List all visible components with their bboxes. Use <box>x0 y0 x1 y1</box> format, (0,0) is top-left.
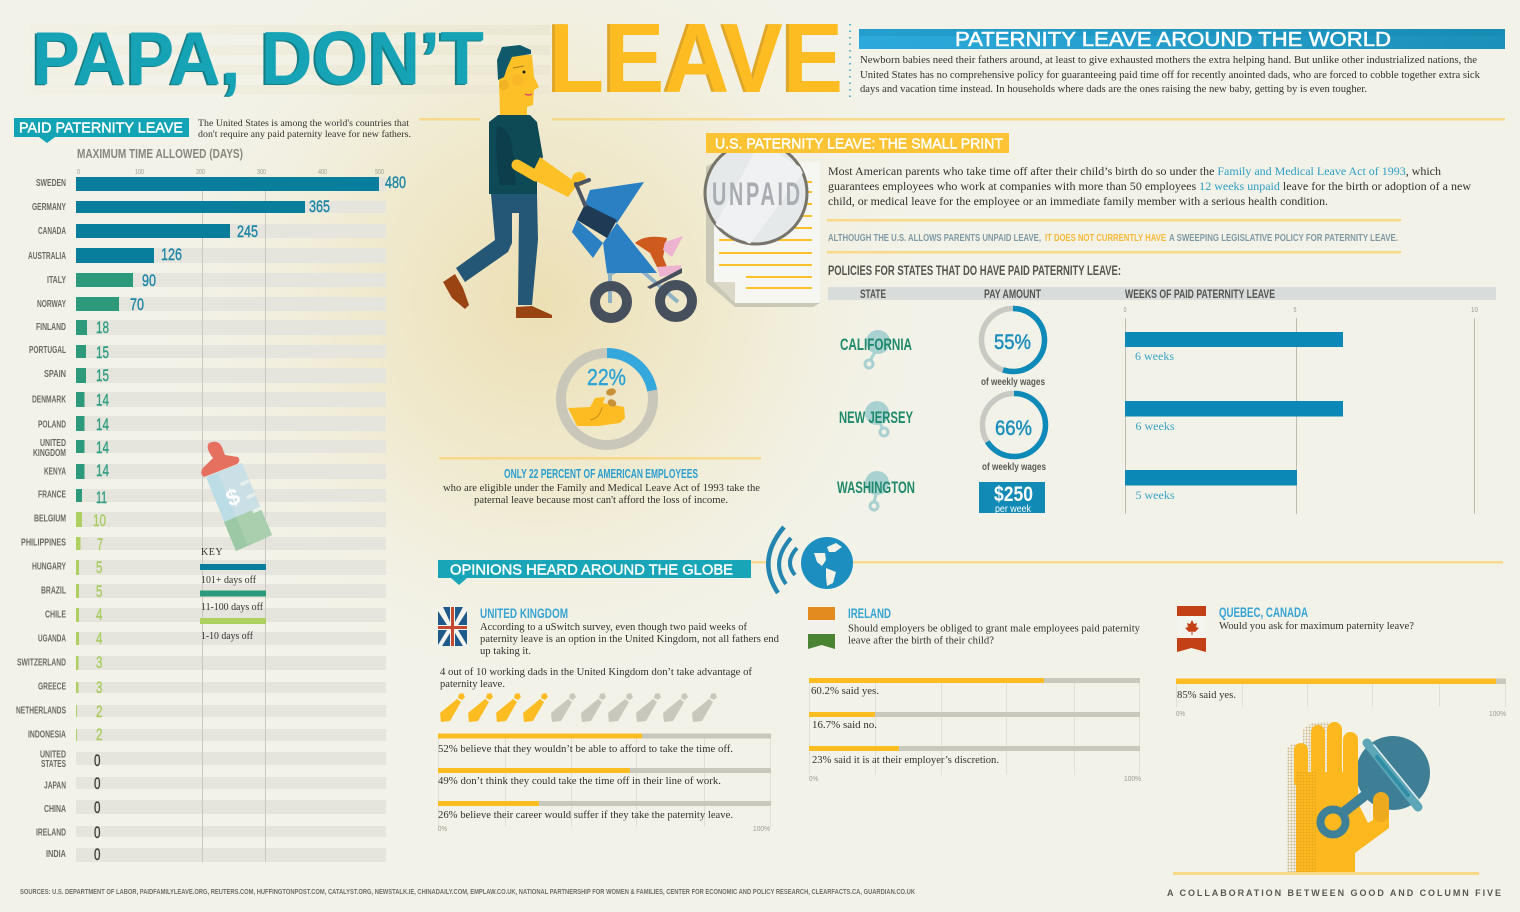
donut: California 55 percent: of weekly wages <box>981 377 1045 388</box>
bar chart: Ireland answers <box>809 678 1141 783</box>
row: Finland: FINLAND <box>36 322 66 333</box>
row: Chile: CHILE <box>45 610 66 620</box>
row: Japan: JAPAN <box>44 780 66 792</box>
icon: baby bottle: $ <box>222 483 244 512</box>
bar chart: weeks of leave: 0 <box>1124 305 1126 314</box>
donut: New Jersey 66 percent: 66% <box>995 417 1032 440</box>
bar: Washington: 5 weeks <box>1136 490 1175 502</box>
row: France: FRANCE <box>38 490 66 500</box>
row: Finland <box>36 318 109 337</box>
text: FMLA description <box>828 166 1472 208</box>
heading: small print: U.S. PATERNITY LEAVE: THE SMALL PRINT <box>715 136 1003 152</box>
text: uSwitch survey: up taking it. <box>480 646 531 657</box>
axis numbers: 300 <box>257 167 266 176</box>
hair <box>497 45 531 80</box>
heading: Ireland: IRELAND <box>848 605 891 621</box>
heading: paid paternity leave <box>14 118 189 143</box>
row: Netherlands <box>16 702 102 721</box>
bar chart: weeks of leave: 10 <box>1471 305 1478 314</box>
title <box>30 3 843 113</box>
description: don't require any paid paternity leave for new fathers. <box>198 129 411 140</box>
row: United States: UNITED <box>40 750 66 760</box>
description <box>198 119 411 140</box>
legend key: 101+ days off <box>201 575 257 586</box>
text: income explanation <box>443 483 760 506</box>
row: France <box>38 488 107 507</box>
text: 4 out of 10 <box>440 667 753 690</box>
sources: SOURCES: U.S. DEPARTMENT OF LABOR, PAIDFAMILYLEAVE.ORG, REUTERS.COM, HUFFINGTONPOST.COM, CATALYST.ORG, NEWSTALK.IE, CHINADAILY.COM, EMPLAW.CO.UK, NATIONAL PARTNERSHIP FOR WOMEN & FAMILIES, CENTER FOR ECONOMIC AND POLICY RESEARCH, CLEARFACTS.CA, GUARDIAN.CO.UK <box>20 887 915 896</box>
baby legs <box>635 237 667 267</box>
table header: WEEKS OF PAID PATERNITY LEAVE <box>1125 289 1275 301</box>
title: PAPA, DON’T <box>32 16 484 100</box>
state name: Washington: WASHINGTON <box>837 479 915 497</box>
heading: around the world <box>859 29 1505 51</box>
pay box: Washington $250 <box>979 482 1045 515</box>
rattle handle and ring <box>1320 790 1372 834</box>
section: Ireland <box>808 605 1141 783</box>
bar: 60.2 percent: 60.2% said yes. <box>811 686 879 697</box>
row: Philippines: PHILIPPINES <box>21 538 66 548</box>
row: United Kingdom: UNITED <box>40 438 66 449</box>
heading: only 22 percent: ONLY 22 PERCENT OF AMERICAN EMPLOYEES <box>504 467 698 481</box>
text: income explanation: who are eligible under the Family and Medical Leave Act of 1993 take the <box>443 483 760 494</box>
text: Ireland question: leave after the birth of their child? <box>848 636 994 646</box>
legend key: 1-10 days off <box>201 631 254 642</box>
row: Germany: GERMANY <box>32 202 66 213</box>
row: Kenya: 14 <box>96 461 109 480</box>
row: Hungary: HUNGARY <box>32 562 66 572</box>
row: Australia: AUSTRALIA <box>28 251 66 262</box>
row: United Kingdom: KINGDOM <box>33 448 66 459</box>
row: Italy: 90 <box>142 271 156 290</box>
row: Ireland: IRELAND <box>36 828 66 838</box>
heading: around the world: PATERNITY LEAVE AROUND THE WORLD <box>955 29 1391 51</box>
neck and face <box>499 55 539 115</box>
row: Poland: POLAND <box>38 420 66 430</box>
stroller basket <box>577 204 617 238</box>
text: income explanation: paternal leave because most can't afford the loss of income. <box>474 495 728 506</box>
intro text: Newborn babies need their fathers around, at least to give exhausted mothers the extra helping hand. But unlike other industrialized nations, the <box>860 55 1477 66</box>
illustration: father with stroller <box>443 45 692 318</box>
table header: PAY AMOUNT <box>984 289 1041 301</box>
bar: New Jersey <box>1125 401 1343 433</box>
row: Switzerland: 3 <box>96 653 102 672</box>
torso <box>489 115 543 194</box>
icon: Canadian flag <box>1177 606 1206 652</box>
row: United Kingdom: 14 <box>96 438 109 457</box>
bar: 60.2 percent <box>809 678 1140 697</box>
donut: 22 percent: 22% <box>587 364 626 390</box>
row: Belgium <box>34 511 106 530</box>
row: Spain: SPAIN <box>44 369 66 380</box>
description: The United States is among the world's countries that <box>198 119 409 129</box>
row: Ireland <box>36 823 100 842</box>
row: Portugal: PORTUGAL <box>29 345 66 356</box>
bar: 49 percent: 49% don’t think they could take the time off in their line of work. <box>438 776 721 787</box>
row: Uganda: UGANDA <box>38 634 66 644</box>
row: India: 0 <box>94 845 100 864</box>
row: Italy: ITALY <box>47 275 66 286</box>
thumb <box>1373 792 1389 822</box>
text: FMLA description: child, or medical leave for the employee or an immediate family member with a serious health condition. <box>828 196 1328 208</box>
row: Kenya: KENYA <box>44 466 66 478</box>
donut: New Jersey 66 percent: of weekly wages <box>982 462 1046 473</box>
jeans <box>456 194 538 305</box>
heading: Quebec: QUEBEC, CANADA <box>1219 604 1308 620</box>
heading: opinions <box>438 560 751 585</box>
icon: signal waves <box>768 527 797 593</box>
bar: 23 percent <box>809 746 1140 766</box>
heading: paid paternity leave: PAID PATERNITY LEAVE <box>19 120 183 136</box>
axis numbers: 400 <box>318 167 327 176</box>
heading: state policies: POLICIES FOR STATES THAT DO HAVE PAID PATERNITY LEAVE: <box>828 263 1121 278</box>
arm <box>517 157 586 197</box>
bar: California <box>1125 332 1343 363</box>
callout: no sweeping policy <box>827 219 1401 254</box>
bar chart: Quebec answer <box>1176 678 1506 718</box>
row: India <box>46 845 100 864</box>
stroller handle <box>576 180 589 205</box>
panel: 22 percent stat <box>439 353 761 506</box>
bar: New Jersey: 6 weeks <box>1136 421 1175 433</box>
row: China <box>44 798 100 817</box>
row: Uganda <box>38 629 102 648</box>
row: Spain: 15 <box>96 366 109 385</box>
stroller frame <box>608 263 678 303</box>
rattle band <box>1367 743 1418 807</box>
row: Kenya <box>44 461 109 480</box>
intro text: United States has no comprehensive policy for guaranteeing paid time off for recently anointed dads, who are forced to cobble together extra sick <box>860 70 1481 81</box>
row: Hungary: 5 <box>96 558 102 577</box>
row: Belgium: BELGIUM <box>34 514 66 524</box>
bar: 52 percent <box>438 734 771 755</box>
text: Ireland question: Should employers be obliged to grant male employees paid paternity <box>848 624 1141 634</box>
row: India: INDIA <box>46 849 66 860</box>
panel: paternity leave around the world <box>859 29 1505 95</box>
axis numbers: 500 <box>375 167 384 176</box>
panel: opinions around the globe <box>20 527 1506 898</box>
bar: 26 percent <box>438 801 771 821</box>
bar chart: UK reasons: 100% <box>753 824 770 833</box>
row: Indonesia: 2 <box>96 725 102 744</box>
row: Canada: CANADA <box>38 226 66 237</box>
row: Greece: 3 <box>96 678 102 697</box>
text: uSwitch survey: paternity leave is an option in the United Kingdom, not all fathers end <box>480 634 780 645</box>
title stripes <box>30 25 550 94</box>
baseline rule <box>1173 872 1479 875</box>
row: Poland <box>38 415 109 434</box>
legend key: 11-100 days off <box>201 602 264 613</box>
text: Quebec question: Would you ask for maximum paternity leave? <box>1219 621 1414 632</box>
row: Portugal <box>29 343 109 362</box>
icon: rattle New Jersey <box>865 401 889 436</box>
bar chart: UK reasons: 0% <box>438 824 447 833</box>
bar: 16.7 percent: 16.7% said no. <box>812 720 877 731</box>
donut: California 55 percent: 55% <box>994 331 1031 354</box>
title: LEAVE <box>546 3 840 113</box>
heading: opinions: OPINIONS HEARD AROUND THE GLOBE <box>450 562 733 578</box>
bar: California: 6 weeks <box>1135 351 1175 363</box>
row: Brazil: 5 <box>96 582 102 601</box>
row: Finland: 18 <box>96 318 109 337</box>
row: Australia <box>28 245 182 264</box>
row: France: 11 <box>96 488 107 507</box>
text: FMLA description: guarantees employees who work at companies with more than 50 employees 12 weeks unpaid leave for the birth or adoption of a new <box>828 181 1472 193</box>
panel: paid paternity leave <box>14 118 411 864</box>
title: PAPA, DON’T <box>30 17 482 101</box>
title: LEAVE <box>549 3 843 113</box>
table header: STATE <box>860 289 886 301</box>
row: Hungary <box>32 558 102 577</box>
stroller seat <box>572 220 657 273</box>
donut: 22 percent <box>561 353 653 445</box>
row: Brazil: BRAZIL <box>41 586 66 596</box>
illustration: document with magnifier <box>705 142 820 307</box>
row: Japan: 0 <box>94 774 100 793</box>
row: China: 0 <box>94 798 100 817</box>
icon: globe <box>801 537 853 589</box>
illustration: hand holding rattle <box>1287 722 1430 873</box>
row: Philippines <box>21 535 103 554</box>
stroller wheels <box>595 285 692 318</box>
sleeve <box>496 125 516 185</box>
row: Indonesia <box>28 725 102 744</box>
row: Norway <box>37 295 144 314</box>
bar chart: days by country <box>16 173 406 864</box>
bar chart: Quebec answer: 85% said yes. <box>1177 690 1236 701</box>
intro text <box>860 55 1481 95</box>
callout: no sweeping policy: A SWEEPING LEGISLATIVE POLICY FOR PATERNITY LEAVE. <box>1169 232 1398 244</box>
bar: 16.7 percent <box>809 712 1140 731</box>
row: Germany: 365 <box>309 197 330 216</box>
bar: 52 percent: 52% believe that they wouldn’t be able to afford to take the time off. <box>438 744 733 755</box>
row: United States: STATES <box>41 759 66 770</box>
donut: New Jersey 66 percent <box>982 394 1046 473</box>
row: Switzerland <box>17 653 102 672</box>
row: China: CHINA <box>44 804 66 815</box>
icon: hand with coins <box>568 387 625 426</box>
pay box: Washington $250: per week <box>995 504 1032 515</box>
bar chart: Ireland answers: 0% <box>809 774 818 783</box>
heading: UK: UNITED KINGDOM <box>480 605 568 621</box>
palm shading <box>1296 772 1316 873</box>
callout: no sweeping policy: ALTHOUGH THE U.S. ALLOWS PARENTS UNPAID LEAVE, <box>828 232 1041 244</box>
row: Norway: NORWAY <box>37 299 66 310</box>
bar chart: weeks of leave: 5 <box>1294 305 1296 314</box>
yellow divider lines <box>419 118 1505 120</box>
text: Ireland question <box>848 624 1141 646</box>
text: uSwitch survey: According to a uSwitch survey, even though two paid weeks of <box>480 622 747 633</box>
row: Poland: 14 <box>96 415 109 434</box>
bar chart: weeks of leave <box>1124 305 1478 514</box>
text: FMLA description: Most American parents who take time off after their child’s birth do so under the Family and Medical Leave Act of 1993 , which <box>828 166 1441 178</box>
row: Sweden <box>36 173 406 192</box>
illustration: document with magnifier: UNPAID <box>712 176 800 212</box>
row: Indonesia: INDONESIA <box>28 730 66 740</box>
back shoe <box>443 274 469 309</box>
row: United States <box>40 750 100 770</box>
bar chart: Quebec answer: 0% <box>1176 709 1185 718</box>
row: Australia: 126 <box>161 245 182 264</box>
row: Norway: 70 <box>130 295 144 314</box>
row: United Kingdom <box>33 438 109 459</box>
row: Chile <box>45 605 102 624</box>
bar: 26 percent: 26% believe their career would suffer if they take the paternity leave. <box>438 810 733 821</box>
axis numbers: 100 <box>135 167 144 176</box>
row: Portugal: 15 <box>96 343 109 362</box>
legend key <box>200 547 266 642</box>
icon: baby bottle <box>201 442 272 551</box>
row: Chile: 4 <box>96 605 102 624</box>
row: Denmark: 14 <box>96 390 109 410</box>
row: Greece <box>38 678 102 697</box>
row: Germany <box>32 197 330 216</box>
footrest <box>647 268 682 289</box>
hand shadow <box>1287 722 1330 873</box>
axis numbers: 200 <box>196 167 205 176</box>
donut: California 55 percent <box>981 308 1045 388</box>
row: Spain <box>44 366 109 385</box>
row: Philippines: 7 <box>97 535 103 554</box>
text: 4 out of 10: 4 out of 10 working dads in the United Kingdom don’t take advantage of <box>440 667 753 678</box>
dotted divider <box>849 24 851 98</box>
fingers and palm <box>1294 722 1389 873</box>
section: Quebec <box>1176 604 1506 718</box>
text: uSwitch survey <box>480 622 780 657</box>
row: Canada: 245 <box>237 222 258 241</box>
intro text: days and vacation time instead. In households where dads are the ones raising the new baby, getting by is even tougher. <box>860 84 1367 95</box>
pictogram: ties <box>440 693 717 722</box>
row: Denmark: DENMARK <box>32 394 67 406</box>
bar: Washington <box>1125 470 1297 502</box>
row: Brazil <box>41 582 102 601</box>
credit: A COLLABORATION BETWEEN GOOD AND COLUMN FIVE <box>1167 888 1501 898</box>
row: United States: 0 <box>94 751 100 770</box>
row: Ireland: 0 <box>94 823 100 842</box>
bar: 49 percent <box>438 768 771 787</box>
face details <box>499 66 532 95</box>
section: United Kingdom <box>438 605 780 833</box>
icon: rattle California <box>865 330 890 368</box>
stroller canopy <box>585 182 644 223</box>
row: Sweden: 480 <box>385 173 406 192</box>
row: Uganda: 4 <box>96 629 102 648</box>
row: Japan <box>44 774 100 793</box>
text: 4 out of 10: paternity leave. <box>440 679 505 690</box>
bar chart: UK reasons <box>438 734 771 833</box>
row: Switzerland: SWITZERLAND <box>17 658 66 668</box>
row: Netherlands: NETHERLANDS <box>16 706 66 716</box>
baby shoes <box>657 236 683 277</box>
panel: small print <box>705 133 1496 515</box>
table header <box>828 287 1496 301</box>
bar chart: Ireland answers: 100% <box>1124 774 1141 783</box>
icon: UK flag <box>438 607 467 648</box>
row: Greece: GREECE <box>38 682 66 692</box>
row: Canada <box>38 222 258 241</box>
front shoe <box>516 306 552 318</box>
row: Denmark <box>32 390 109 410</box>
legend key: KEY <box>201 547 223 558</box>
bar: 23 percent: 23% said it is at their employer’s discretion. <box>812 755 999 766</box>
icon: rattle Washington <box>865 471 889 510</box>
row: Netherlands: 2 <box>96 702 102 721</box>
bar chart: Quebec answer: 100% <box>1489 709 1506 718</box>
state name: California: CALIFORNIA <box>840 336 912 354</box>
axis numbers: 0 <box>77 167 80 176</box>
axis numbers <box>77 167 384 176</box>
icon: Irish flag <box>808 607 835 649</box>
pay box: Washington $250: $250 <box>994 483 1033 506</box>
callout: no sweeping policy: IT DOES NOT CURRENTLY HAVE <box>1045 232 1166 244</box>
rattle ball <box>1356 736 1430 810</box>
row: Belgium: 10 <box>93 511 106 530</box>
state name: New Jersey: NEW JERSEY <box>839 409 913 427</box>
chart subtitle: MAXIMUM TIME ALLOWED (DAYS) <box>77 146 243 161</box>
row: Italy <box>47 271 156 290</box>
row: Sweden: SWEDEN <box>36 178 66 189</box>
